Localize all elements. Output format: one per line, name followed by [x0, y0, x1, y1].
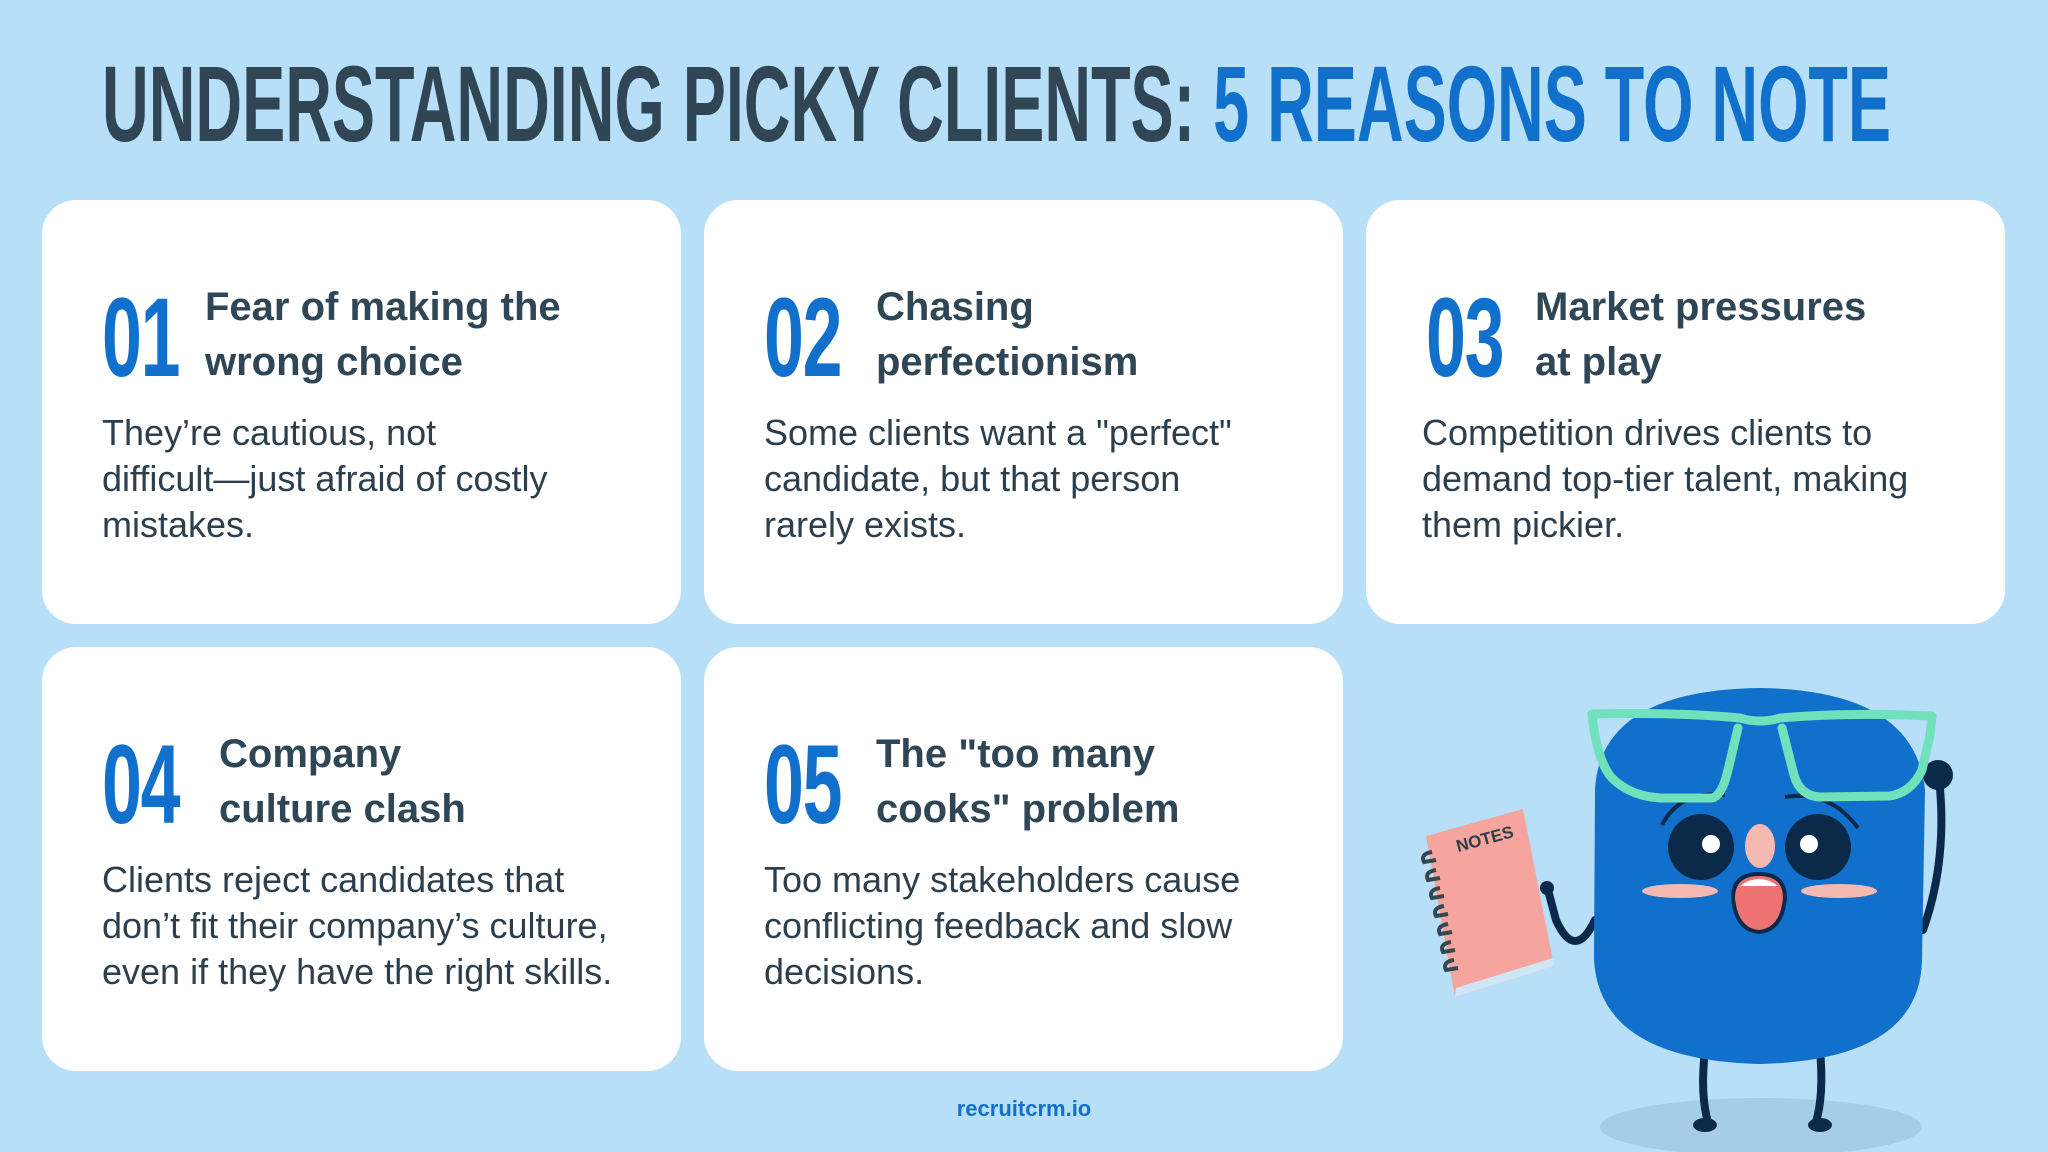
- heading 01: wrong choice: [205, 340, 463, 384]
- body 01: mistakes.: [102, 504, 254, 545]
- heading 03: Market pressures: [1535, 285, 1866, 329]
- footer url: recruitcrm.io: [957, 1096, 1091, 1121]
- body 01: difficult—just afraid of costly: [102, 458, 548, 499]
- body 05: [764, 859, 1240, 992]
- heading 05: [876, 732, 1179, 831]
- heading 01: [204, 285, 561, 384]
- body 05: decisions.: [764, 951, 924, 992]
- heading 02: perfectionism: [876, 340, 1138, 384]
- number 01: 01: [102, 275, 179, 400]
- heading 03: [1535, 285, 1866, 384]
- mascot illustration: NOTES: [1454, 822, 1516, 856]
- body 05: conflicting feedback and slow: [764, 905, 1232, 946]
- body 03: demand top-tier talent, making: [1422, 458, 1908, 499]
- card 04: [42, 647, 681, 1071]
- body 03: them pickier.: [1422, 504, 1624, 545]
- body 01: They’re cautious, not: [102, 412, 436, 453]
- body 02: [764, 412, 1232, 545]
- body 02: rarely exists.: [764, 504, 966, 545]
- body 04: Clients reject candidates that: [102, 859, 564, 900]
- body 04: don’t fit their company’s culture,: [102, 905, 608, 946]
- body 04: [102, 859, 612, 992]
- heading 02: Chasing: [876, 285, 1034, 329]
- body 03: Competition drives clients to: [1422, 412, 1872, 453]
- heading 05: The "too many: [876, 732, 1155, 776]
- body 05: Too many stakeholders cause: [764, 859, 1240, 900]
- number 03: 03: [1426, 275, 1503, 400]
- heading 04: Company: [219, 732, 401, 776]
- card 03: [1366, 200, 2005, 624]
- heading 01: Fear of making the: [205, 285, 561, 329]
- card 02: [704, 200, 1343, 624]
- body 04: even if they have the right skills.: [102, 951, 612, 992]
- heading 05: cooks" problem: [876, 787, 1179, 831]
- number 02: 02: [764, 275, 841, 400]
- card 01: [42, 200, 681, 624]
- heading 02: [876, 285, 1138, 384]
- number 04: 04: [102, 722, 179, 847]
- heading 03: at play: [1535, 340, 1662, 384]
- body 02: candidate, but that person: [764, 458, 1180, 499]
- card 05: [704, 647, 1343, 1071]
- body 01: [102, 412, 548, 545]
- heading 04: culture clash: [219, 787, 466, 831]
- heading 04: [219, 732, 466, 831]
- body 03: [1422, 412, 1908, 545]
- number 05: 05: [764, 722, 841, 847]
- body 02: Some clients want a "perfect": [764, 412, 1232, 453]
